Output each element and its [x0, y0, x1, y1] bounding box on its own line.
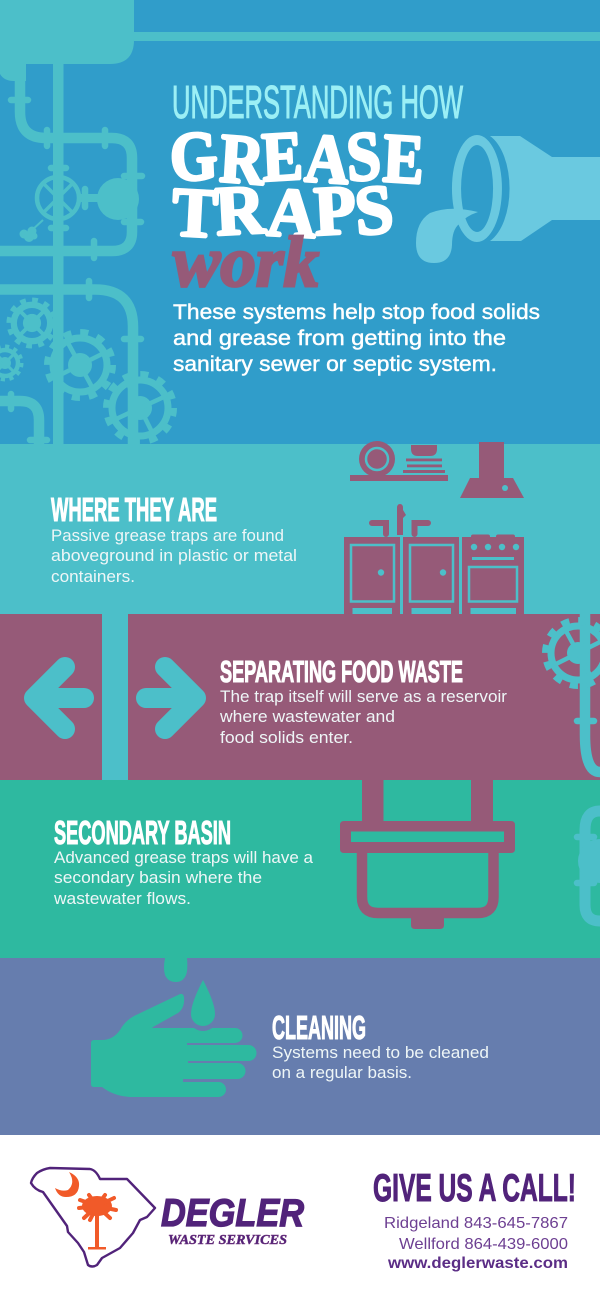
icon: crescent — [55, 1172, 79, 1197]
contact details: Wellford 864-439-6000 — [399, 1236, 568, 1253]
intro text: sanitary sewer or septic system. — [173, 352, 497, 376]
intro text — [173, 300, 540, 376]
heading: WHERE THEY ARE — [51, 491, 217, 528]
heading: SECONDARY BASIN — [54, 814, 231, 851]
icon: range hood — [460, 442, 524, 498]
title: work: work — [173, 222, 319, 302]
icon: valve wheel — [20, 177, 79, 242]
icon: left arrow — [34, 667, 84, 729]
title: traps: TRAPS — [170, 171, 396, 254]
title: grease: GREASE — [168, 118, 426, 200]
icon: pipe edge — [577, 811, 600, 921]
text block — [219, 688, 508, 747]
logo wordmark: DEGLER — [161, 1192, 304, 1235]
intro text: and grease from getting into the — [173, 326, 506, 350]
panel: separating food waste — [0, 614, 600, 783]
icon: gear and pipe — [546, 614, 600, 772]
icon: shelf with dishes — [350, 441, 448, 481]
logo tagline: WASTE SERVICES — [168, 1233, 287, 1248]
text block: Advanced grease traps will have a — [54, 849, 314, 867]
text block: The trap itself will serve as a reservoir — [220, 688, 508, 706]
text block: on a regular basis. — [272, 1064, 412, 1082]
logo — [31, 1168, 304, 1266]
contact details: www.deglerwaste.com — [387, 1255, 568, 1272]
icon: pipe pouring liquid — [416, 135, 600, 263]
text block: Systems need to be cleaned — [272, 1044, 489, 1062]
text block: where wastewater and — [219, 708, 395, 726]
heading: CLEANING — [272, 1009, 366, 1046]
text block — [51, 527, 297, 586]
icon: state outline — [31, 1168, 155, 1266]
icon: palmetto — [79, 1195, 116, 1250]
text block: aboveground in plastic or metal — [51, 547, 297, 565]
contact details: Ridgeland 843-645-7867 — [384, 1215, 568, 1232]
text block: wastewater flows. — [53, 890, 191, 908]
panel: hero — [0, 0, 600, 444]
text block: Passive grease traps are found — [51, 527, 284, 545]
icon: right arrow — [146, 667, 196, 729]
text block: containers. — [51, 568, 135, 586]
icon: hand with water drops — [91, 958, 256, 1097]
icon: sink basin — [340, 780, 515, 929]
panel: where they are — [0, 441, 600, 614]
panel: secondary basin — [0, 780, 600, 958]
vertical pipe with arrows — [34, 614, 128, 783]
panel: footer — [0, 1135, 600, 1308]
icon: cabinets, sink and stove — [344, 504, 524, 614]
text block: food solids enter. — [220, 729, 353, 747]
text block — [272, 1044, 489, 1082]
pipe network — [0, 0, 600, 444]
text block: secondary basin where the — [54, 869, 262, 887]
panel: cleaning — [0, 958, 600, 1135]
contact details — [384, 1215, 568, 1272]
text block — [53, 849, 314, 908]
icon: gears — [0, 301, 173, 441]
intro text: These systems help stop food solids — [173, 300, 540, 324]
